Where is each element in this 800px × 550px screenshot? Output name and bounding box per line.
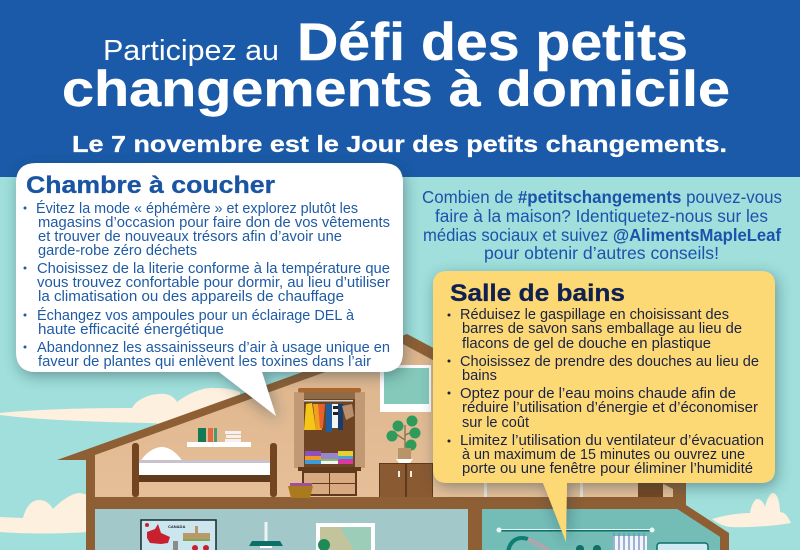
laundry basket xyxy=(288,483,313,498)
call to action text: pour obtenir d’autres conseils! xyxy=(484,243,719,263)
title xyxy=(62,13,730,117)
bedroom tips: Échangez vos ampoules pour un éclairage DEL à xyxy=(37,307,355,324)
living room wall xyxy=(95,509,468,550)
bathroom tips: Réduisez le gaspillage en choisissant des xyxy=(460,307,729,323)
bathroom tips: bains xyxy=(462,368,497,384)
wall shelf with books xyxy=(187,428,251,447)
bedroom tips: Choisissez de la literie conforme à la température que xyxy=(37,261,390,277)
window xyxy=(380,365,431,412)
bedroom tips: Abandonnez les assainisseurs d’air à usage unique en xyxy=(37,340,390,356)
bedroom tips: garde-robe zéro déchets xyxy=(38,243,197,259)
map of Canada poster: CANADA xyxy=(168,524,185,529)
bathroom tips: Limitez l’utilisation du ventilateur d’évacuation xyxy=(460,433,764,449)
call to action text: médias sociaux et suivez @AlimentsMapleLeaf xyxy=(423,225,781,245)
bathroom tips: Optez pour de l’eau moins chaude afin de xyxy=(460,386,736,402)
bed xyxy=(132,443,277,497)
house frame walls and floor xyxy=(86,456,729,550)
cabinet xyxy=(379,463,433,497)
title: Participez au xyxy=(103,35,279,67)
panel: bedroom speech bubble xyxy=(16,163,403,416)
bedroom tips: Évitez la mode « éphémère » et explorez plutôt les xyxy=(36,200,358,217)
house attic wall xyxy=(95,340,686,497)
header band xyxy=(0,0,800,177)
potted plant xyxy=(386,416,420,463)
furniture legs and dark box below yellow card xyxy=(484,480,663,497)
bathroom wall xyxy=(482,509,720,550)
call to action text: Combien de #petitschangements pouvez-vous xyxy=(422,187,782,207)
bedroom tips: faveur de plantes qui enlèvent les toxines dans l’air xyxy=(38,354,371,370)
call to action text: faire à la maison? Identiquetez-nous sur les xyxy=(435,206,768,226)
bathroom tips: porte ou une fenêtre pour éliminer l’humidité xyxy=(462,461,753,477)
framed picture xyxy=(316,523,375,550)
hanging clothes xyxy=(304,403,354,432)
bedroom tips: et trouver de nouveaux trésors afin d’avoir une xyxy=(38,229,342,245)
bedroom tips: haute efficacité énergétique xyxy=(38,322,224,338)
map of Canada poster xyxy=(141,520,216,550)
illustration: house xyxy=(57,334,729,550)
bathroom heading: Salle de bains xyxy=(450,280,625,307)
bathroom tips: sur le coût xyxy=(462,415,529,431)
panel: bathroom speech bubble xyxy=(433,271,775,542)
bathroom tips: réduire l’utilisation d’énergie et d’économiser xyxy=(462,400,758,416)
title: changements à domicile xyxy=(62,61,730,117)
bathroom tips: barres de savon sans emballage au lieu de xyxy=(462,321,742,337)
folded clothes xyxy=(305,451,353,464)
subtitle: Le 7 novembre est le Jour des petits changements. xyxy=(72,131,727,157)
call to action text xyxy=(422,187,782,263)
bedroom heading: Chambre à coucher xyxy=(26,172,275,199)
panel: sky background xyxy=(0,170,800,550)
towel xyxy=(613,533,647,550)
bathroom tips: flacons de gel de douche en plastique xyxy=(462,336,711,352)
sink xyxy=(657,543,708,550)
bedroom tips: vous trouvez confortable pour dormir, au lieu d’utiliser xyxy=(37,275,390,291)
bathroom tips: à un maximum de 15 minutes ou ouvrez une xyxy=(462,447,745,463)
wardrobe xyxy=(294,388,365,496)
ceiling lamp xyxy=(249,522,283,548)
bathroom tips: Choisissez de prendre des douches au lieu de xyxy=(460,354,759,370)
illustration: clouds xyxy=(0,388,791,534)
title: Défi des petits xyxy=(297,13,688,72)
shower and bathroom fixtures xyxy=(496,528,708,550)
house roof xyxy=(57,334,686,497)
bedroom tips: magasins d’occasion pour faire don de vos vêtements xyxy=(38,215,390,231)
bedroom tips: la climatisation ou des appareils de chauffage xyxy=(38,289,344,305)
bedroom tips xyxy=(24,200,390,370)
bathroom tips xyxy=(448,307,764,477)
